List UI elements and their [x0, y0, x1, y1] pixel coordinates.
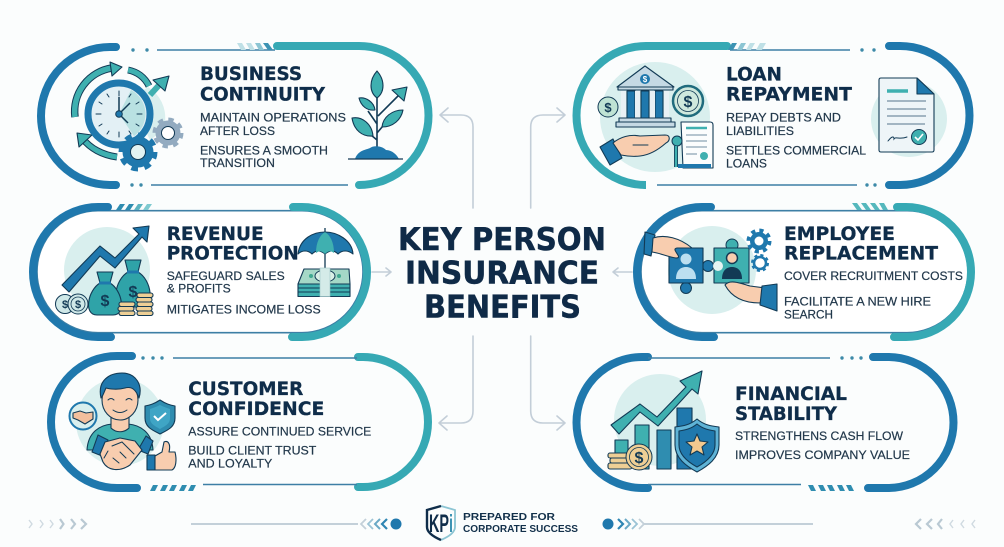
left chevrons	[29, 520, 53, 528]
heading: LOAN	[726, 65, 782, 86]
icon: puzzle pieces, hands and gears	[644, 226, 777, 314]
arrow: to business continuity	[440, 108, 473, 208]
icon: bars, coins, arrow and shield: $	[635, 450, 644, 467]
right divider	[602, 518, 813, 530]
panel: loan repayment	[576, 43, 970, 187]
logo: KPI shield	[427, 506, 455, 540]
panel: business continuity	[41, 43, 428, 187]
text block: LIABILITIES	[726, 124, 794, 138]
text block	[167, 269, 321, 316]
heading	[200, 64, 326, 106]
heading	[735, 384, 847, 425]
icon: bars, coins, arrow and shield	[608, 371, 719, 472]
icon: bank with hand, coins, key and document: $	[643, 75, 648, 84]
panel: financial stability	[576, 356, 954, 491]
text block	[188, 425, 371, 470]
arrow: to financial stability	[531, 336, 565, 430]
text block: MITIGATES INCOME LOSS	[167, 302, 321, 316]
icon: clock with arrows and gears	[75, 62, 181, 168]
heading: STABILITY	[735, 404, 838, 425]
icon: growing plant	[348, 71, 407, 159]
heading	[726, 65, 852, 106]
text block: STRENGTHENS CASH FLOW	[735, 429, 903, 443]
text block: AND LOYALTY	[188, 456, 272, 470]
text block: REPAY DEBTS AND	[726, 111, 841, 125]
text block: AFTER LOSS	[200, 124, 275, 138]
footer text	[463, 511, 578, 535]
icon: money bags with rising arrow: $	[62, 299, 68, 311]
heading: REPLACEMENT	[784, 243, 938, 264]
text block: TRANSITION	[200, 156, 275, 170]
icon: smiling person with handshake	[70, 373, 176, 470]
panel frame	[33, 204, 367, 337]
icon: umbrella over cash	[298, 228, 353, 296]
right chevrons	[916, 519, 942, 529]
arrow: to customer confidence	[439, 336, 473, 430]
heading: CUSTOMER	[188, 379, 303, 400]
heading: EMPLOYEE	[784, 224, 895, 245]
arrow: to loan repayment	[531, 108, 565, 208]
logo: KPI shield: KPi	[429, 510, 453, 538]
title: BENEFITS	[424, 290, 581, 326]
left chevrons dark	[60, 519, 86, 529]
icon: money bags with rising arrow: $	[101, 293, 110, 310]
arrow: to revenue protection	[372, 268, 391, 276]
text block: MAINTAIN OPERATIONS	[200, 111, 346, 125]
title: KEY PERSON	[398, 222, 606, 258]
icon: bank with hand, coins, key and document: $	[684, 94, 693, 111]
text block	[200, 111, 346, 170]
panel frame	[576, 356, 954, 491]
icon: signed document	[871, 78, 947, 157]
text block: SETTLES COMMERCIAL	[726, 143, 866, 157]
title: INSURANCE	[405, 256, 599, 292]
text block: SAFEGUARD SALES	[167, 269, 285, 283]
panel: employee replacement	[637, 203, 971, 337]
text block	[735, 429, 910, 462]
text block: ENSURES A SMOOTH	[200, 143, 328, 157]
heading: REVENUE	[167, 224, 264, 245]
icon: bank with hand, coins, key and document: $	[604, 100, 612, 115]
footer text: PREPARED FOR	[463, 511, 555, 523]
text block: BUILD CLIENT TRUST	[188, 443, 317, 457]
icon: money bags with rising arrow: $	[75, 299, 81, 311]
left divider	[191, 518, 402, 530]
text block: FACILITATE A NEW HIRE	[784, 295, 931, 309]
heading: PROTECTION	[167, 243, 299, 264]
text block: SEARCH	[784, 308, 833, 322]
footer text: CORPORATE SUCCESS	[463, 523, 578, 535]
panel frame	[637, 203, 971, 337]
text block: ASSURE CONTINUED SERVICE	[188, 425, 371, 439]
panel frame	[576, 43, 970, 187]
icon: money bags with rising arrow: $	[129, 284, 138, 301]
panel: customer confidence	[51, 356, 428, 491]
text block: IMPROVES COMPANY VALUE	[735, 448, 910, 462]
heading: BUSINESS	[200, 64, 302, 85]
panel: revenue protection	[33, 204, 367, 337]
text block: & PROFITS	[167, 282, 231, 296]
heading	[188, 379, 324, 420]
icon: bank with hand, coins, key and document	[598, 62, 713, 172]
panel frame	[51, 356, 428, 491]
text block: COVER RECRUITMENT COSTS	[784, 269, 963, 283]
right chevrons light	[950, 520, 975, 528]
text block	[784, 269, 963, 322]
heading: REPAYMENT	[726, 85, 852, 106]
heading	[167, 224, 299, 264]
text block: LOANS	[726, 156, 767, 170]
arrow: to employee replacement	[613, 268, 632, 276]
heading: CONTINUITY	[200, 84, 326, 106]
footer	[29, 506, 975, 540]
panel frame	[41, 43, 428, 187]
title	[398, 222, 606, 326]
heading: CONFIDENCE	[188, 399, 324, 420]
text block	[726, 111, 866, 170]
heading	[784, 224, 938, 264]
heading: FINANCIAL	[735, 384, 847, 405]
icon: money bags with rising arrow	[56, 226, 153, 316]
